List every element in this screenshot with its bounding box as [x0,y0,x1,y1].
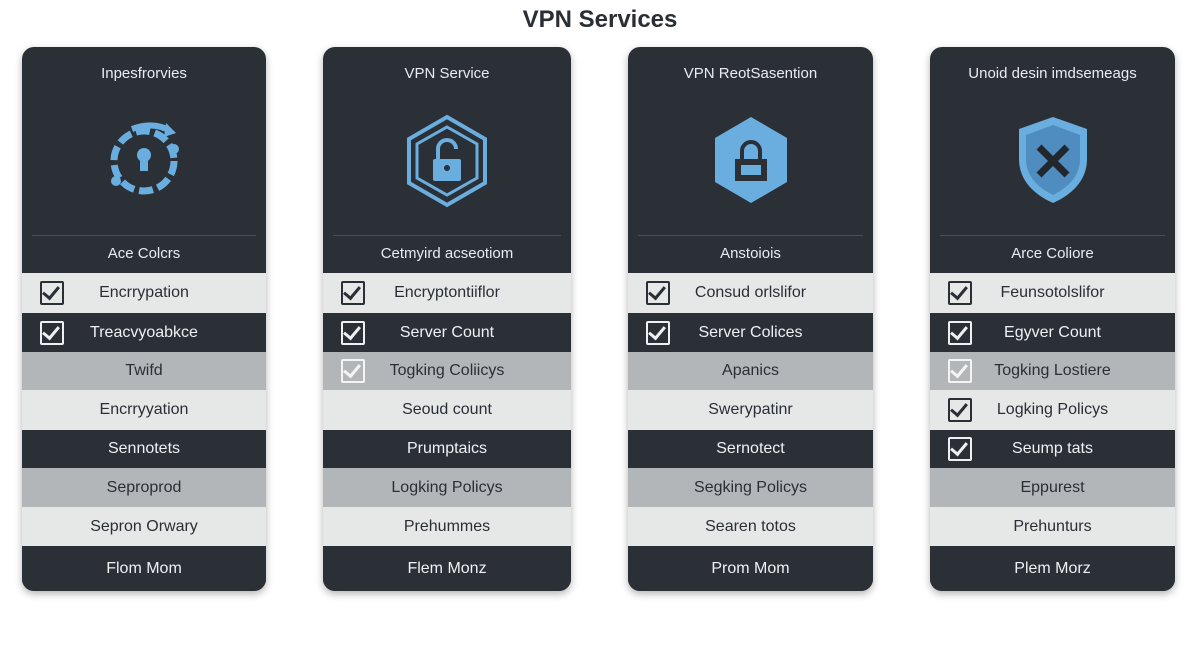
panel: card 2: Server Count [400,324,494,340]
panel: card 1: Encrryyation [100,401,188,418]
panel: card 3: Apanics [722,362,779,379]
icon: filled hexagon lock [715,117,787,203]
panel: card 1: Seproprod [107,478,181,496]
panel: card 2: Flem Monz [407,560,487,576]
panel: card 3: VPN ReotSasention [684,65,817,82]
panel: card 4: Eppurest [1020,478,1085,496]
panel: card 2: Logking Policys [391,478,503,496]
icon: rotating lock [110,122,179,194]
panel: card 2: Prehummes [404,518,490,534]
panel: card 2 [323,47,571,591]
panel: card 3: Searen totos [705,518,796,534]
panel: card 1: Twifd [125,362,163,379]
card header [32,65,256,262]
panel: card 1: Treacvyoabkce [90,324,198,340]
panel: card 4 [930,47,1175,591]
panel: card 2: Prumptaics [407,440,487,457]
panel: card 2: Seoud count [402,401,492,418]
panel: card 2: Cetmyird acseotiom [381,245,513,262]
panel: card 4: Togking Lostiere [994,362,1111,379]
panel: card 3 [628,47,873,591]
panel: card 3: Anstoiois [720,245,781,262]
panel: card 2: Togking Coliicys [390,362,504,379]
panel: card 4: Prehunturs [1013,518,1092,534]
panel: card 3: Prom Mom [711,560,790,576]
panel: card 1: Sepron Orwary [90,518,198,534]
card header: Ace Colcrs [108,245,180,262]
panel: card 3: Sernotect [716,440,785,457]
panel: card 1: Sennotets [108,440,180,457]
panel: card 2: Encryptontiiflor [394,284,500,301]
panel: card 3: Swerypatinr [708,401,793,418]
panel: card 2: VPN Service [404,65,490,82]
card header: Inpesfrorvies [101,65,187,82]
icon: hexagon lock [407,114,487,208]
panel: card 4: Feunsotolslifor [1000,284,1105,301]
title: VPN Services [523,6,677,33]
panel: card 4: Seump tats [1012,440,1093,457]
feature rows: Encrrypation [99,284,189,301]
panel: card 3: Consud orlslifor [695,284,806,301]
panel: card 3: Segking Policys [694,478,807,496]
icon: shield with X [1019,117,1087,203]
panel: card 4: Unoid desin imdsemeags [968,65,1137,82]
panel: card 1: Flom Mom [106,560,182,576]
panel: card 4: Arce Coliore [1011,245,1094,262]
panel: card 3: Server Colices [698,324,803,340]
panel: card 4: Egyver Count [1004,324,1101,340]
feature rows [22,273,266,313]
panel: card 1 [22,47,266,591]
panel: card 4: Logking Policys [997,401,1108,418]
panel: card 4: Plem Morz [1014,560,1091,576]
